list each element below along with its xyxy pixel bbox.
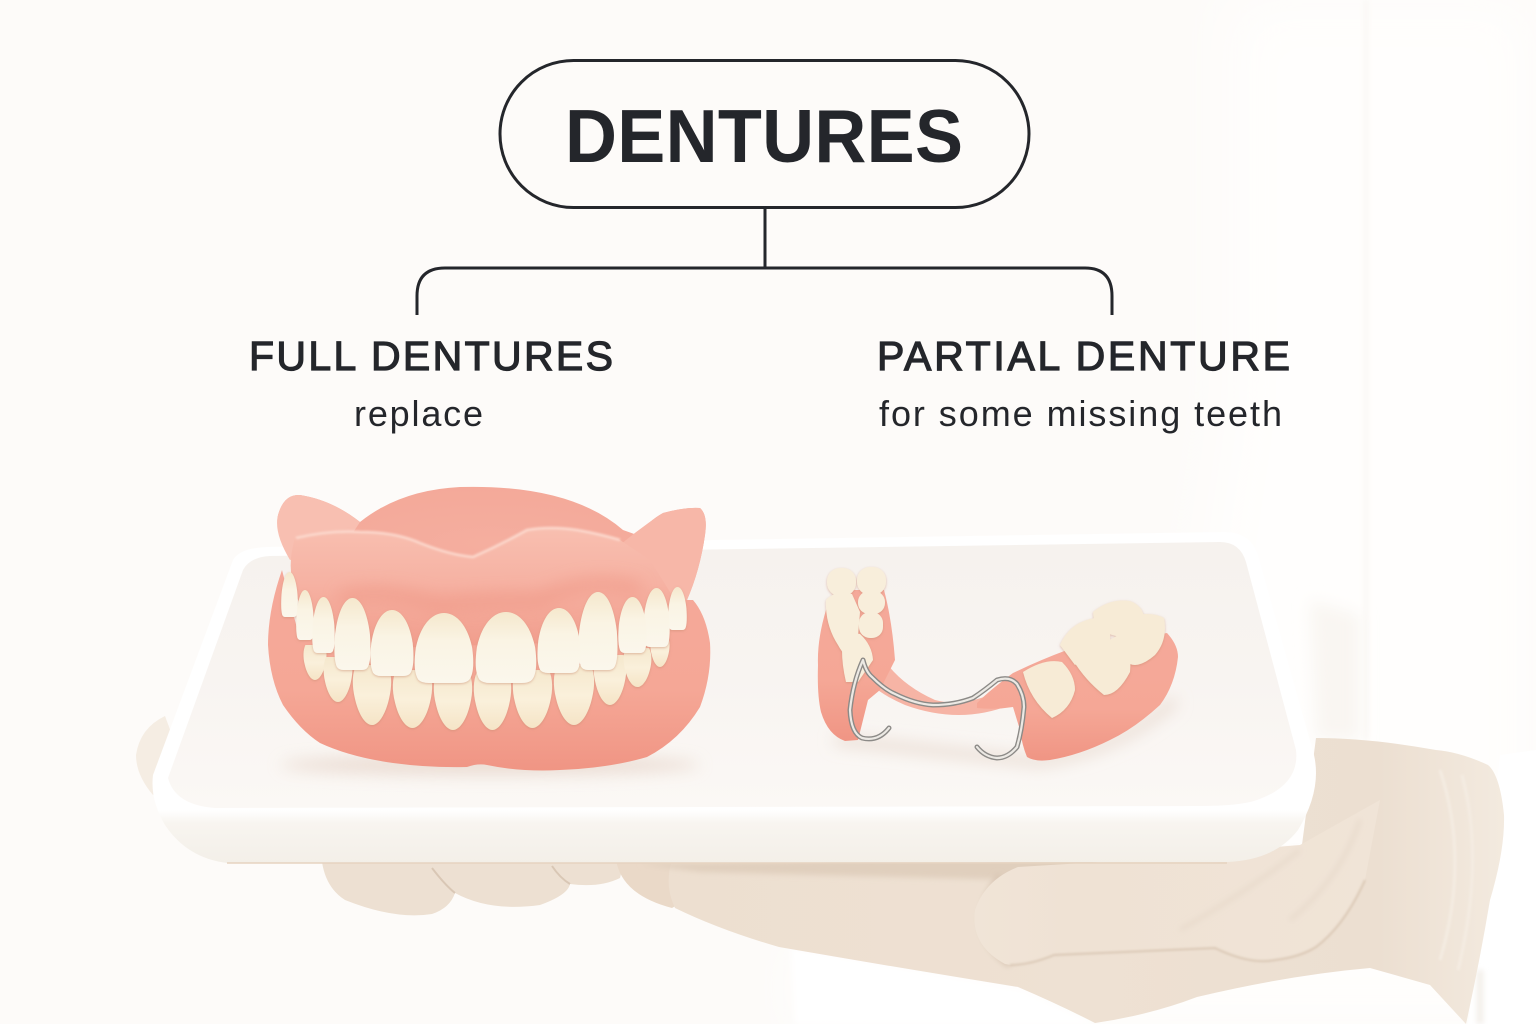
partial denture label: PARTIAL DENTURE bbox=[877, 333, 1290, 379]
white tray bbox=[152, 532, 1316, 863]
back finger bbox=[616, 860, 720, 908]
right gloved hand bbox=[616, 738, 1504, 1024]
lower teeth row bbox=[303, 637, 670, 730]
partial shadow bbox=[835, 700, 1175, 762]
left saddle gum bbox=[818, 590, 895, 741]
full dentures description: replace bbox=[354, 393, 483, 434]
partial denture description: for some missing teeth bbox=[879, 393, 1282, 434]
shadow under tray bbox=[640, 850, 1330, 880]
title: DENTURES bbox=[565, 93, 963, 178]
upper teeth row bbox=[281, 572, 687, 683]
lab coat background bbox=[791, 0, 1536, 1024]
partial denture bbox=[818, 567, 1178, 762]
full dentures label bbox=[249, 333, 613, 434]
title pill bbox=[500, 60, 1029, 208]
connector gum band bbox=[860, 640, 1010, 715]
full denture bbox=[268, 487, 710, 775]
cuff wrinkles bbox=[1440, 770, 1473, 970]
left teeth bbox=[826, 567, 886, 682]
gum necks shading bbox=[340, 584, 640, 605]
full dentures label: FULL DENTURES bbox=[249, 333, 613, 379]
glove palm and cuff bbox=[669, 738, 1504, 1024]
right saddle gum bbox=[977, 633, 1178, 761]
upper gum bbox=[291, 528, 675, 650]
denture shadow bbox=[280, 755, 700, 775]
metal clasp bbox=[850, 660, 1024, 758]
partial denture label bbox=[877, 333, 1290, 434]
thumb bbox=[974, 800, 1380, 965]
back wing and palate bbox=[277, 487, 706, 600]
connector lines bbox=[417, 208, 1112, 315]
lower gum bbox=[268, 570, 710, 770]
right teeth bbox=[1023, 600, 1165, 718]
left hand behind tray bbox=[136, 716, 625, 915]
